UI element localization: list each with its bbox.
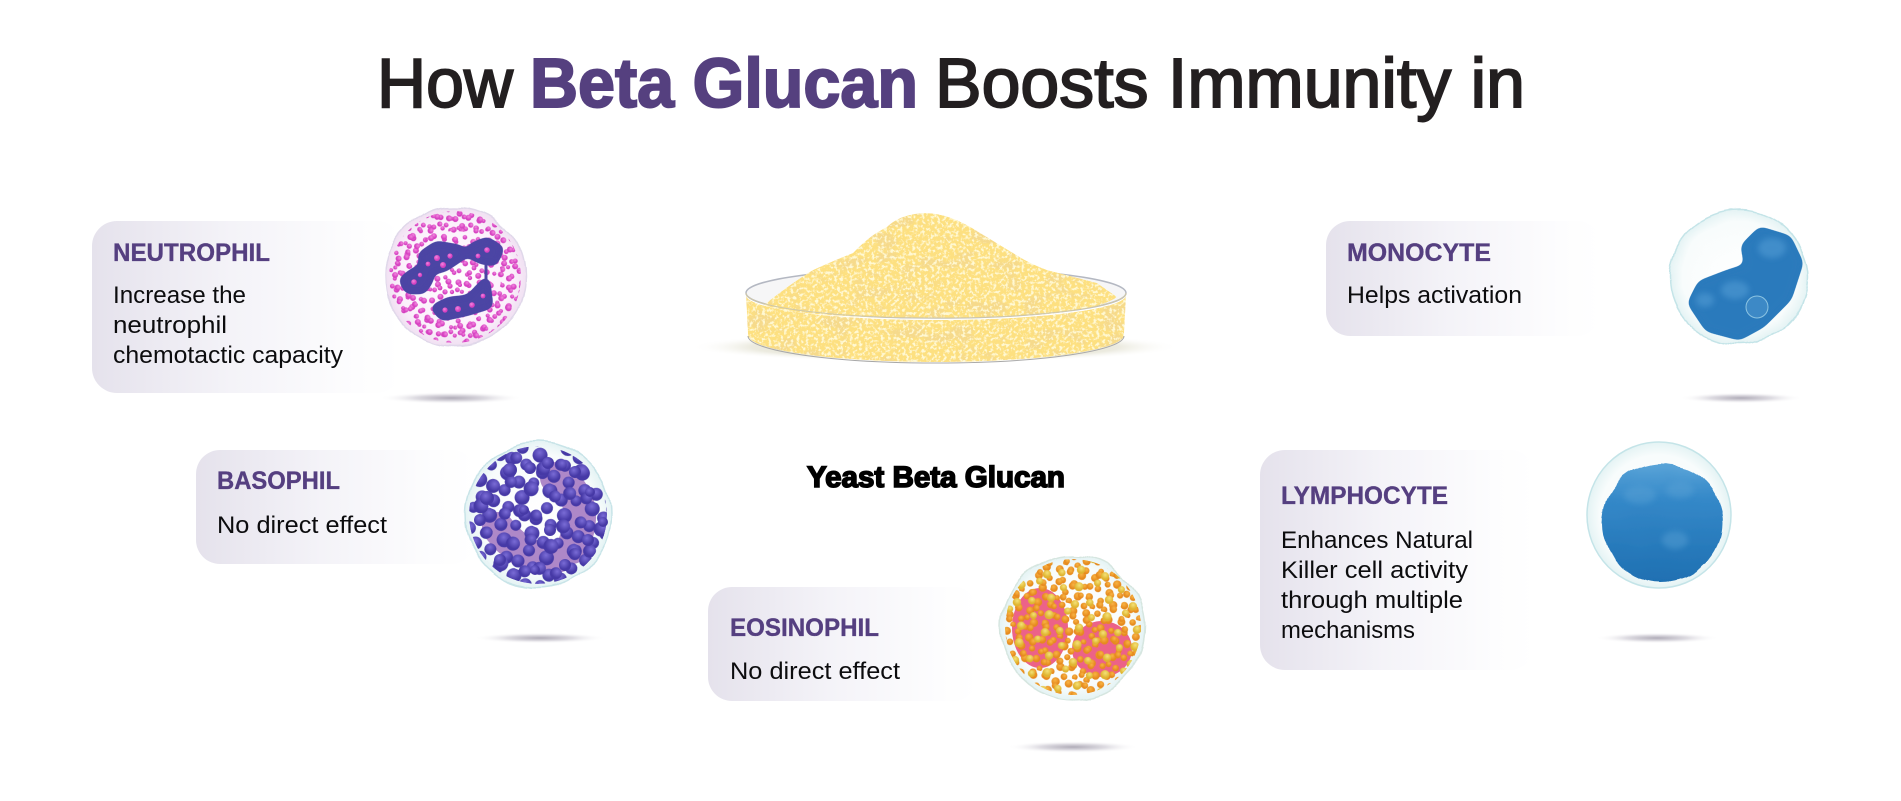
icon: monocyte cell: [1670, 210, 1808, 344]
panel: neutrophil: neutrophil: [113, 312, 227, 339]
shadow: lymphocyte: [1595, 632, 1719, 644]
panel: eosinophil: [708, 587, 978, 701]
panel: neutrophil: [92, 221, 402, 393]
product: yeast beta glucan powder in dish: [690, 213, 1180, 363]
panel: lymphocyte: [1260, 450, 1535, 670]
panel: monocyte: MONOCYTE: [1347, 239, 1491, 267]
panel: monocyte: [1326, 221, 1601, 336]
icon: basophil cell: [465, 442, 611, 588]
panel: lymphocyte: through multiple: [1281, 587, 1463, 614]
shadow: monocyte: [1679, 392, 1803, 404]
panel: lymphocyte: Enhances Natural: [1281, 527, 1473, 554]
panel: eosinophil: No direct effect: [730, 658, 900, 685]
shadow: eosinophil: [1007, 741, 1139, 753]
label: yeast beta glucan: Yeast Beta Glucan: [807, 461, 1065, 494]
panel: basophil: No direct effect: [217, 512, 387, 539]
icon: eosinophil cell: [1001, 555, 1145, 699]
infographic canvas: [92, 56, 1808, 752]
icon: lymphocyte cell: [1587, 442, 1731, 588]
title: How: [377, 44, 513, 122]
panel: neutrophil: chemotactic capacity: [113, 342, 343, 369]
panel: lymphocyte: Killer cell activity: [1281, 557, 1468, 584]
title: [377, 44, 1525, 122]
title: Beta Glucan: [530, 44, 918, 122]
shadow: neutrophil: [379, 392, 523, 404]
icon: neutrophil cell: [385, 207, 528, 347]
panel: basophil: [196, 450, 476, 564]
shadow: basophil: [474, 632, 606, 644]
panel: monocyte: Helps activation: [1347, 282, 1522, 309]
panel: lymphocyte: mechanisms: [1281, 617, 1415, 644]
panel: lymphocyte: LYMPHOCYTE: [1281, 482, 1448, 510]
panel: neutrophil: NEUTROPHIL: [113, 239, 270, 267]
panel: neutrophil: Increase the: [113, 282, 246, 309]
panel: eosinophil: EOSINOPHIL: [730, 614, 879, 642]
panel: basophil: BASOPHIL: [217, 467, 340, 495]
title: Boosts Immunity in: [935, 44, 1525, 122]
